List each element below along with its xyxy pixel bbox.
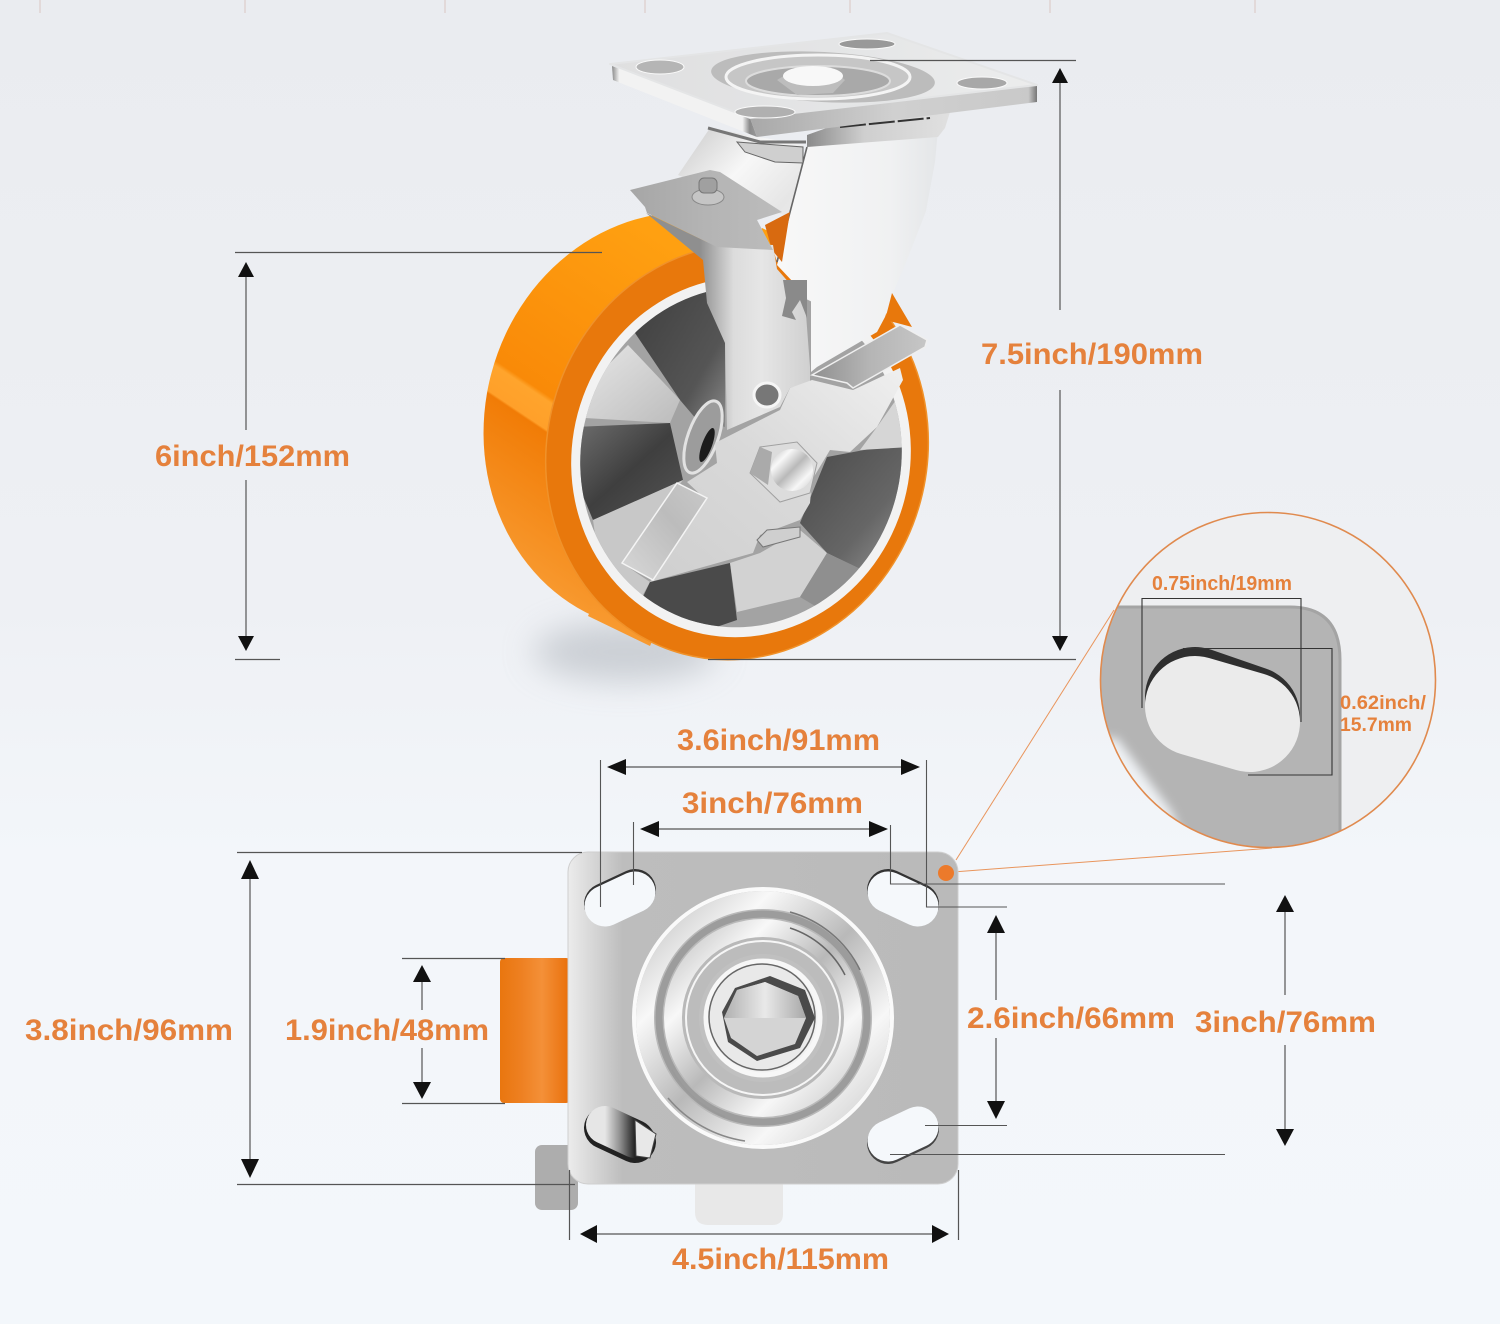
under-plate collar: [708, 128, 806, 163]
dimension: plate width 4.5inch: 4.5inch/115mm: [672, 1243, 889, 1276]
dark slot edge: [1195, 697, 1250, 722]
dimension: hole spacing 2.6inch: [967, 915, 1175, 1119]
dimension: plate depth 3.8inch: [25, 852, 582, 1184]
slot height bracket: [1183, 648, 1332, 775]
caster top view illustration: [500, 852, 958, 1225]
raised bearing rings: [634, 889, 892, 1147]
dimension: hole spacing 3inch: [1195, 895, 1376, 1146]
slot top-left: [605, 890, 635, 906]
dimension: hole spacing 3inch: 3inch/76mm: [1195, 1006, 1376, 1039]
bolt spacing arrow: [640, 787, 888, 837]
foot pedal lower: [622, 483, 707, 580]
base plate: [568, 852, 958, 1184]
fork arm shadow edge: [777, 147, 807, 262]
brake orange gap: [765, 212, 790, 262]
hole width arrow: 3.6inch/91mm: [677, 724, 880, 757]
magnified plate corner: [1101, 606, 1342, 847]
brake body: [646, 213, 810, 430]
wheel tread: [437, 169, 913, 675]
wheel seen from above: [500, 958, 570, 1103]
swivel fork front arm: [777, 130, 938, 372]
slot bottom-right: [888, 1127, 918, 1143]
wheel face orange sliver: [885, 293, 912, 327]
wheel orange face: [499, 201, 975, 703]
lens callout connector lines: [953, 610, 1272, 872]
centre hex bolt: [709, 964, 815, 1070]
top edge tick marks: [40, 0, 1255, 13]
dimension: plate depth 3.8inch: 3.8inch/96mm: [25, 1014, 233, 1047]
dimension: overall height 7.5inch: [708, 60, 1203, 660]
lens background: [1101, 513, 1435, 847]
magnified slot detail lens: [1085, 512, 1436, 870]
slot top-right: [888, 890, 918, 906]
swivel bearing: [807, 112, 950, 147]
lens ring: [1100, 512, 1436, 848]
brake top plate: [630, 170, 782, 250]
swivel fork back arm: [678, 128, 803, 262]
brake dimple: [754, 383, 780, 407]
foot pedal upper: [812, 325, 927, 388]
callout dot on plate corner: [938, 865, 954, 881]
plate raised centre: [710, 46, 936, 108]
brake plate bolt: [692, 178, 724, 205]
slot width bracket: [1142, 598, 1301, 722]
lever small slot: [757, 527, 800, 547]
dimension: plate width 4.5inch: [570, 1170, 958, 1276]
brake pedal bottom: [695, 1180, 783, 1225]
slot width label: 0.75inch/19mm: [1152, 573, 1292, 595]
hole width arrow: [607, 724, 920, 775]
dimension: hole spacing 2.6inch: 2.6inch/66mm: [967, 1002, 1175, 1035]
top mounting plate: [610, 33, 1037, 137]
slot height label: [1340, 693, 1427, 736]
slot height label: 0.62inch/: [1340, 693, 1427, 714]
slot bottom-left with metal: [605, 1120, 656, 1158]
metal rim: [531, 238, 951, 676]
dimension: wheel diameter 6inch: 6inch/152mm: [155, 440, 350, 473]
axle hex bolt: [750, 442, 817, 502]
brake body notch: [782, 280, 807, 320]
axle hole: [676, 396, 730, 478]
hub with spokes: [580, 292, 902, 628]
wheel floor shadow: [533, 622, 717, 682]
dimension: overall height 7.5inch: 7.5inch/190mm: [981, 338, 1203, 371]
brake lever arm: [650, 368, 903, 582]
dimension lines for top view mounting holes: [600, 724, 1225, 1154]
dimension: wheel diameter 6inch: [155, 252, 602, 660]
caster side view illustration: [437, 33, 1037, 703]
slot height label: 15.7mm: [1340, 715, 1412, 736]
bolt spacing arrow: 3inch/76mm: [682, 787, 863, 820]
plate holes: [636, 39, 1007, 118]
dimension: wheel width 1.9inch: 1.9inch/48mm: [285, 1014, 489, 1047]
brake tab left: [535, 1145, 578, 1210]
dimension: wheel width 1.9inch: [285, 958, 505, 1104]
